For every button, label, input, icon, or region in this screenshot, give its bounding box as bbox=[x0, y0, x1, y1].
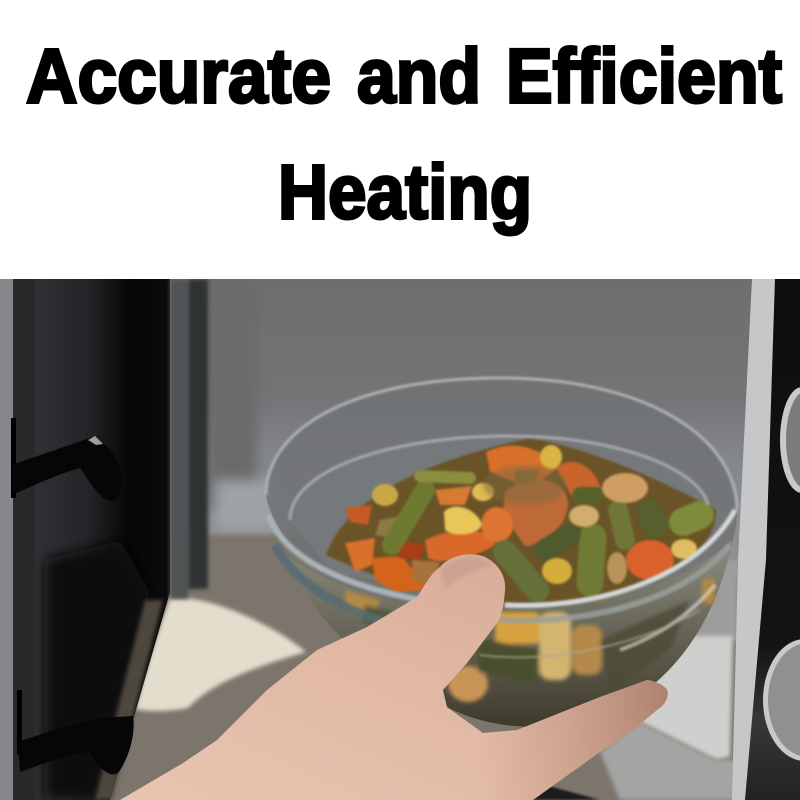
orange carrots bbox=[345, 446, 674, 592]
bowl lower body tint bbox=[285, 540, 732, 727]
microwave interior back wall bbox=[205, 279, 755, 579]
lower door latch bbox=[18, 716, 134, 774]
title bbox=[26, 34, 782, 236]
green beans bbox=[392, 476, 700, 590]
vegetables seen through glass bbox=[345, 578, 715, 702]
photo: hand placing a bowl of vegetables into a microwave bbox=[0, 279, 800, 800]
glass bowl bbox=[266, 378, 737, 727]
patch of light on floor bbox=[130, 598, 306, 711]
hand silhouette: palm, thumb and fingers bbox=[120, 554, 668, 800]
dark door interior bbox=[34, 279, 208, 800]
food base bbox=[326, 438, 716, 604]
title: and bbox=[357, 34, 481, 120]
bowl back and interior bbox=[266, 419, 737, 606]
seasoning on the food bbox=[483, 465, 567, 505]
door edge bbox=[0, 279, 35, 800]
microwave control panel bbox=[732, 279, 800, 800]
control knob lower bbox=[763, 639, 800, 761]
thumb tip shading bbox=[442, 558, 493, 587]
upper door latch bbox=[12, 436, 122, 501]
shading on fingers bbox=[514, 680, 668, 800]
bowl rims and highlights bbox=[266, 378, 737, 657]
hand holding the bowl bbox=[120, 554, 668, 800]
corn and potatoes bbox=[372, 445, 697, 584]
control knob upper bbox=[780, 387, 800, 493]
microwave interior floor bbox=[90, 535, 745, 800]
title: Heating bbox=[278, 150, 532, 236]
title: Accurate bbox=[26, 34, 331, 120]
